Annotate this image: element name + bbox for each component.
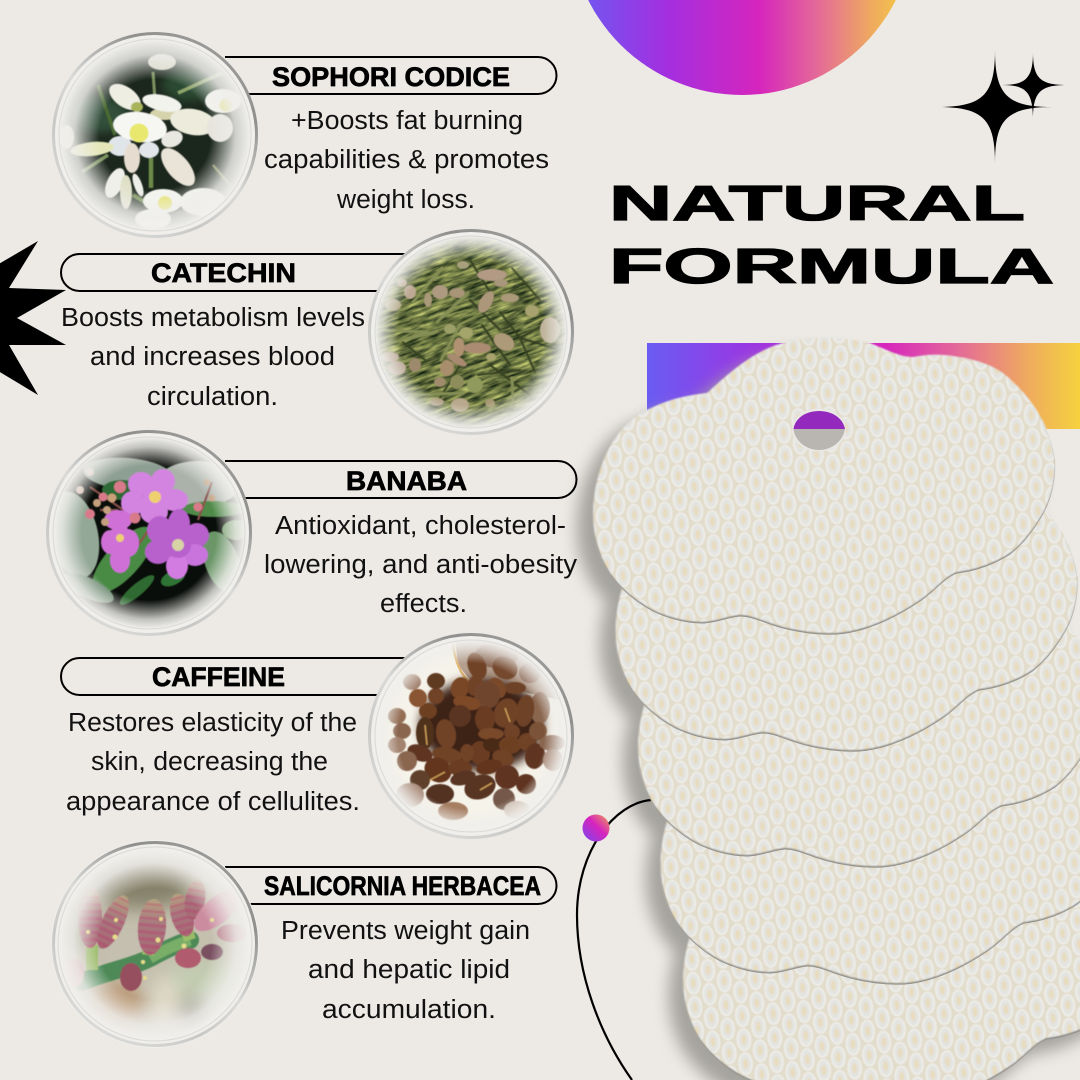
photo: pink flowers [41,430,252,636]
description: appearance of cellulites. [66,788,360,816]
pill heading: BANABA [346,466,467,496]
panel: Catechin [60,229,574,435]
gradient dot [582,814,610,842]
title: Natural Formula: FORMULA [609,240,1054,294]
title: Natural Formula: NATURAL [609,177,1025,231]
panel: Caffeine [61,632,575,839]
description: circulation. [147,383,278,411]
description: Antioxidant, cholesterol- [275,512,566,540]
description [264,512,577,618]
pill heading: SOPHORI CODICE [272,62,510,92]
description: Prevents weight gain [281,917,530,945]
pill heading: CATECHIN [151,258,296,288]
title: Natural Formula [609,177,1054,294]
icon: sparkle stars [937,50,1067,163]
pill heading [61,658,405,695]
photo: coffee beans [368,632,575,839]
photo: green tea [368,229,574,435]
description: capabilities & promotes [264,146,549,174]
pill heading: SALICORNIA HERBACEA [264,871,541,901]
description: and hepatic lipid [308,956,510,984]
photo: salicornia plant [50,840,260,1050]
panel: Banaba [41,430,577,636]
description: Boosts metabolism levels [61,304,365,332]
description [61,304,365,411]
description: accumulation. [322,996,496,1024]
description: skin, decreasing the [91,748,328,776]
description: lowering, and anti-obesity [264,551,577,579]
description: weight loss. [336,186,475,214]
description [281,917,530,1024]
photo: white flowers [50,30,260,240]
icon: black spiky burst [0,241,66,395]
connector arc line [577,800,651,1080]
description [264,107,549,214]
panel: Salicornia Herbacea [50,840,556,1050]
gradient banner behind patches [647,343,1080,429]
pill heading [225,57,556,94]
pill heading: CAFFEINE [152,662,285,692]
description: and increases blood [90,343,335,371]
description: +Boosts fat burning [291,107,523,135]
stack of slimming patches [593,338,1080,1080]
description: Restores elasticity of the [68,709,357,737]
panel: Sophori Codice [50,30,556,240]
pill heading [225,461,576,498]
top gradient semicircle [570,0,914,95]
pill heading [61,254,405,291]
patch hole [792,408,846,452]
pill heading [225,867,556,904]
description: effects. [380,590,467,618]
patch drop shadows [577,352,1080,1080]
description [66,709,360,816]
